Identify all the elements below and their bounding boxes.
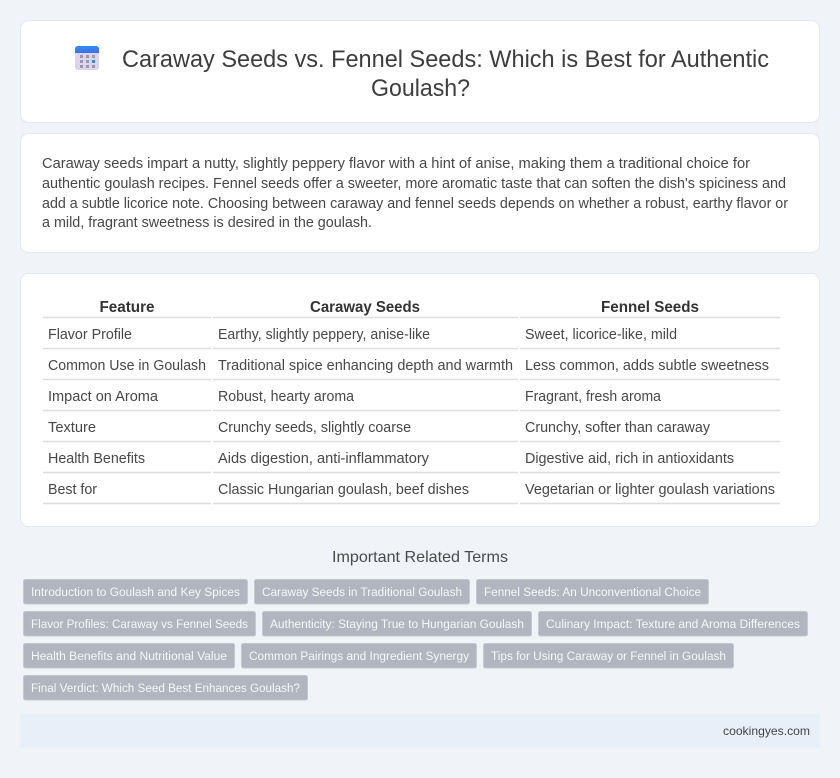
row: texture xyxy=(48,420,711,436)
row: common use xyxy=(48,358,769,374)
tag: health benefits xyxy=(24,644,234,668)
table header: Caraway Seeds xyxy=(310,299,420,316)
row: flavor profile: Earthy, slightly peppery, anise-like xyxy=(218,327,430,343)
intro text: a mild, fragrant sweetness is desired in the goulash. xyxy=(42,215,372,231)
intro text: authentic goulash recipes. Fennel seeds offer a sweeter, more aromatic taste that can soften the dish's spiciness and xyxy=(42,176,786,192)
row: impact on aroma: Robust, hearty aroma xyxy=(218,389,354,405)
row: common use: Common Use in Goulash xyxy=(48,358,206,374)
intro text xyxy=(42,156,788,231)
row: texture: Texture xyxy=(48,420,96,436)
row: health benefits: Health Benefits xyxy=(48,451,145,467)
table header: Feature xyxy=(100,299,155,316)
tag: flavor profiles xyxy=(24,612,256,636)
tag: tips xyxy=(484,644,734,668)
row: flavor profile xyxy=(48,327,677,343)
related terms heading: Important Related Terms xyxy=(332,549,508,566)
tag: culinary impact xyxy=(538,612,808,636)
tag: final verdict xyxy=(24,676,308,700)
tag: authenticity xyxy=(262,612,532,636)
row: texture: Crunchy, softer than caraway xyxy=(525,420,711,436)
row: health benefits xyxy=(48,451,734,467)
table header xyxy=(100,299,699,316)
tag: final verdict: Final Verdict: Which Seed Best Enhances Goulash? xyxy=(31,681,300,695)
row: best for: Vegetarian or lighter goulash variations xyxy=(525,482,775,498)
tag: introduction: Introduction to Goulash and Key Spices xyxy=(31,585,240,599)
tag: pairings xyxy=(242,644,476,668)
tag: authenticity: Authenticity: Staying True to Hungarian Goulash xyxy=(270,617,524,631)
footer xyxy=(20,714,820,748)
tag: fennel unconventional: Fennel Seeds: An Unconventional Choice xyxy=(484,585,701,599)
tag: tips: Tips for Using Caraway or Fennel in Goulash xyxy=(491,649,726,663)
intro text: add a subtle licorice note. Choosing between caraway and fennel seeds depends on whether a robust, earthy flavor or xyxy=(42,196,788,212)
tag: pairings: Common Pairings and Ingredient Synergy xyxy=(249,649,470,663)
row: flavor profile: Flavor Profile xyxy=(48,327,132,343)
related terms tags xyxy=(24,580,808,700)
row: health benefits: Digestive aid, rich in antioxidants xyxy=(525,451,734,467)
title: Caraway Seeds vs. Fennel Seeds: Which is Best for Authentic xyxy=(122,46,769,73)
tag: caraway in traditional goulash: Caraway Seeds in Traditional Goulash xyxy=(262,585,462,599)
row: health benefits: Aids digestion, anti-inflammatory xyxy=(218,451,430,467)
tag: introduction xyxy=(24,580,248,604)
comparison table panel xyxy=(20,274,820,526)
tag: fennel unconventional xyxy=(476,580,708,604)
row: flavor profile: Sweet, licorice-like, mild xyxy=(525,327,677,343)
row: common use: Less common, adds subtle sweetness xyxy=(525,358,769,374)
table header: Fennel Seeds xyxy=(601,299,699,316)
row: best for xyxy=(48,482,775,498)
title: Goulash? xyxy=(371,75,470,102)
row: texture: Crunchy seeds, slightly coarse xyxy=(218,420,411,436)
row: impact on aroma: Fragrant, fresh aroma xyxy=(525,389,661,405)
row: common use: Traditional spice enhancing depth and warmth xyxy=(218,358,513,374)
row: best for: Best for xyxy=(48,482,97,498)
intro panel xyxy=(20,134,820,252)
row: best for: Classic Hungarian goulash, beef dishes xyxy=(218,482,469,498)
tag: health benefits: Health Benefits and Nutritional Value xyxy=(31,649,227,663)
table grid xyxy=(43,318,780,504)
tag: caraway in traditional goulash xyxy=(254,580,470,604)
row: impact on aroma: Impact on Aroma xyxy=(48,389,158,405)
row: impact on aroma xyxy=(48,389,661,405)
intro text: Caraway seeds impart a nutty, slightly peppery flavor with a hint of anise, making them a traditional choice for xyxy=(42,156,750,172)
title xyxy=(122,46,769,102)
tag: flavor profiles: Flavor Profiles: Caraway vs Fennel Seeds xyxy=(31,617,248,631)
footer: cookingyes.com xyxy=(723,724,810,738)
icon: calendar xyxy=(75,46,99,70)
tag: culinary impact: Culinary Impact: Texture and Aroma Differences xyxy=(546,617,800,631)
header panel xyxy=(20,20,820,122)
